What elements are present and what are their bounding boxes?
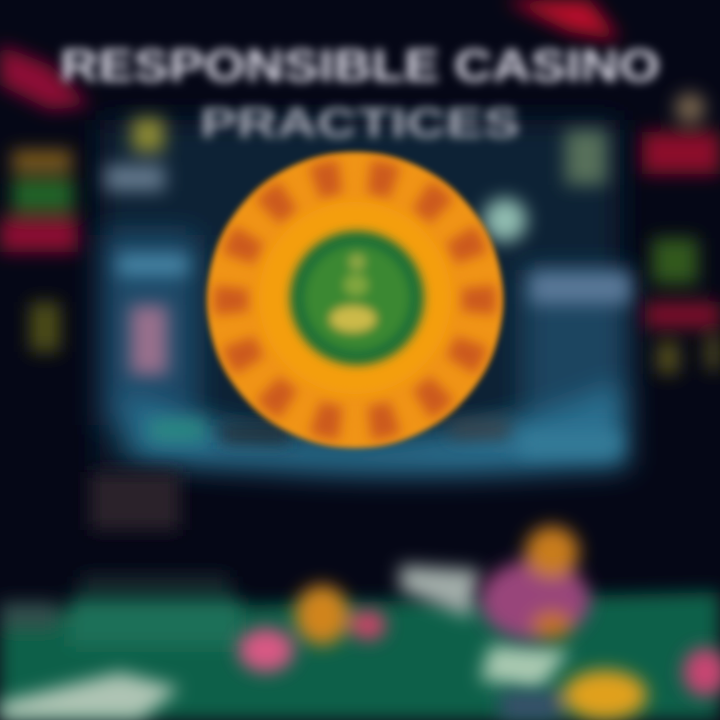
- title: RESPONSIBLE CASINO: [60, 40, 660, 91]
- wheel center badge: [290, 231, 424, 365]
- title: [60, 40, 660, 146]
- table: [0, 576, 720, 720]
- wheel disc: [207, 152, 503, 448]
- left panel items: [105, 118, 205, 440]
- left side decorations: [0, 45, 90, 352]
- playing cards: [0, 565, 570, 720]
- panel: central scene: [100, 120, 630, 475]
- small caption block: [90, 472, 180, 530]
- right side decorations: [505, 0, 720, 374]
- wheel wedges: [231, 176, 479, 424]
- right panel items: [220, 130, 630, 456]
- title: PRACTICES: [200, 99, 520, 146]
- wheel inner ring: [259, 202, 451, 394]
- wheel: [207, 152, 503, 448]
- poker chips: [238, 526, 720, 720]
